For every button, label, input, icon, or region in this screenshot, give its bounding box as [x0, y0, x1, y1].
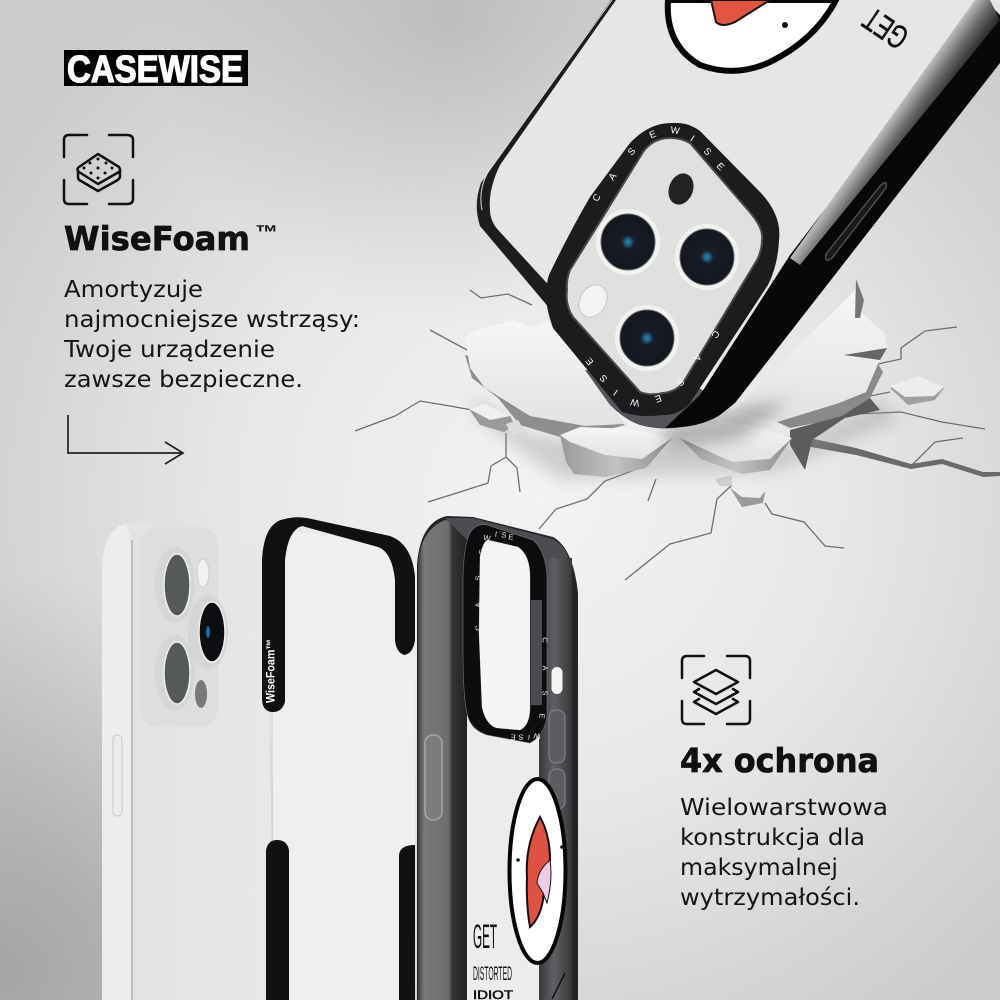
flash — [197, 559, 209, 587]
exploded view: black case — [417, 516, 578, 1000]
ring text upper: W — [670, 125, 680, 137]
ring text — [474, 529, 550, 742]
WiseFoam label: WiseFoam™ — [266, 639, 278, 703]
exploded view: black case: GET — [473, 918, 497, 956]
text block: protection description: maksymalnej — [680, 855, 838, 881]
ring text upper: C — [591, 192, 604, 204]
phone shadow — [660, 400, 790, 450]
foam strip top — [262, 517, 415, 712]
foam strip left lower — [266, 840, 289, 1000]
ring text: E — [510, 732, 516, 742]
ring text: E — [477, 549, 487, 555]
ring text: S — [474, 575, 482, 581]
right plate — [735, 279, 887, 428]
text block: protection description: Wielowarstwowa — [680, 795, 888, 821]
ring text lower: A — [690, 351, 703, 363]
text block: WiseFoam description: zawsze bezpieczne. — [64, 367, 303, 393]
clear case back — [477, 0, 1000, 420]
icon: layers in viewfinder — [682, 656, 750, 724]
ring opening — [479, 540, 530, 730]
lens 3 — [615, 305, 679, 371]
ring text: A — [474, 602, 482, 608]
camera plateau — [567, 138, 762, 394]
ring text upper: S — [626, 146, 638, 158]
highlight on left edge — [481, 0, 612, 210]
phone with case striking the wall — [477, 0, 1000, 450]
ring text upper: A — [607, 171, 620, 183]
ring text: S — [501, 530, 507, 540]
icon: foam in viewfinder — [64, 135, 133, 204]
ring text upper: I — [688, 134, 696, 144]
ring text: C — [474, 625, 482, 631]
lens 1 — [596, 209, 660, 275]
clear back — [467, 700, 539, 1000]
camera ring — [547, 123, 779, 416]
ring text: W — [483, 533, 492, 543]
lens 2 — [675, 224, 739, 290]
side button — [113, 735, 122, 816]
grey edge bevel — [790, 0, 1000, 265]
ring text lower: E — [653, 392, 663, 404]
phone body — [102, 521, 275, 1000]
right inner band — [539, 558, 572, 1000]
text block: protection description: konstrukcja dla — [680, 825, 865, 851]
left side band — [418, 520, 467, 1000]
plate bottom left — [560, 427, 672, 477]
text block: WiseFoam description: najmocniejsze wstrząsy: — [64, 307, 360, 333]
side button — [826, 182, 886, 260]
ring text: S — [540, 690, 550, 696]
heading: WiseFoam: WiseFoam — [64, 219, 250, 258]
ring metal highlight — [531, 600, 542, 705]
lens left bottom — [155, 635, 195, 711]
ring text lower: C — [708, 328, 721, 340]
ring text upper: E — [648, 129, 658, 141]
text block: protection description: wytrzymałości. — [680, 885, 860, 911]
white foam sheet — [273, 530, 415, 1000]
left side button — [425, 735, 442, 820]
text block: WiseFoam description: Twoje urządzenie — [63, 337, 275, 363]
right buttons — [549, 710, 565, 809]
lower rim — [585, 370, 720, 428]
emblem — [668, 0, 836, 71]
right black frame — [665, 0, 1000, 428]
ring text: E — [537, 713, 547, 719]
ring text: A — [540, 665, 550, 671]
diagonal line — [552, 973, 565, 999]
arrow — [68, 415, 183, 464]
small debris — [469, 376, 944, 507]
exploded view: black case: DISTORTED — [473, 964, 512, 985]
top band — [445, 518, 570, 565]
ring text upper: E — [714, 161, 726, 173]
cracked wall — [355, 279, 1000, 580]
left plate — [465, 320, 625, 437]
text block: WiseFoam description: Amortyzuje — [64, 277, 203, 303]
camera bump — [140, 527, 218, 727]
lens left top — [155, 547, 195, 623]
ring text: I — [494, 529, 498, 539]
ring text: C — [540, 637, 550, 643]
crack shadow — [470, 395, 900, 480]
case emblem — [510, 779, 566, 963]
side frame — [102, 524, 131, 1000]
ring text upper: S — [701, 146, 713, 158]
ring text: I — [528, 732, 530, 742]
text block: protection description — [680, 795, 888, 911]
text block: WiseFoam description — [63, 277, 360, 393]
left black edge — [477, 0, 616, 316]
crack lines — [355, 290, 985, 580]
flash — [573, 280, 613, 322]
ring text upper — [591, 125, 726, 204]
ring text lower: S — [674, 376, 686, 388]
exploded view: white phone — [102, 521, 275, 1000]
camera ring — [463, 525, 547, 743]
ring text lower: W — [630, 396, 640, 408]
plate bottom right — [680, 420, 792, 474]
logo: CASEWISE — [67, 49, 243, 91]
ring text lower: E — [584, 355, 596, 367]
microphone — [195, 680, 207, 708]
ring text: W — [532, 731, 541, 741]
thick right crack — [800, 436, 1000, 477]
foam layer — [262, 517, 415, 1000]
ring text: E — [508, 532, 514, 542]
ring text: S — [518, 732, 524, 742]
heading: WiseFoam: ™ — [255, 222, 278, 244]
ring text lower: S — [598, 372, 610, 384]
mute switch cut-out — [552, 667, 562, 694]
ring text lower — [584, 328, 721, 408]
microphone — [664, 170, 698, 208]
case frame — [417, 516, 578, 1000]
foam strip right lower — [399, 845, 415, 1000]
dark crack opening — [790, 398, 880, 470]
lens right — [188, 594, 228, 670]
ring text lower: I — [612, 387, 620, 397]
heading: 4x ochrona: 4x ochrona — [680, 741, 879, 780]
